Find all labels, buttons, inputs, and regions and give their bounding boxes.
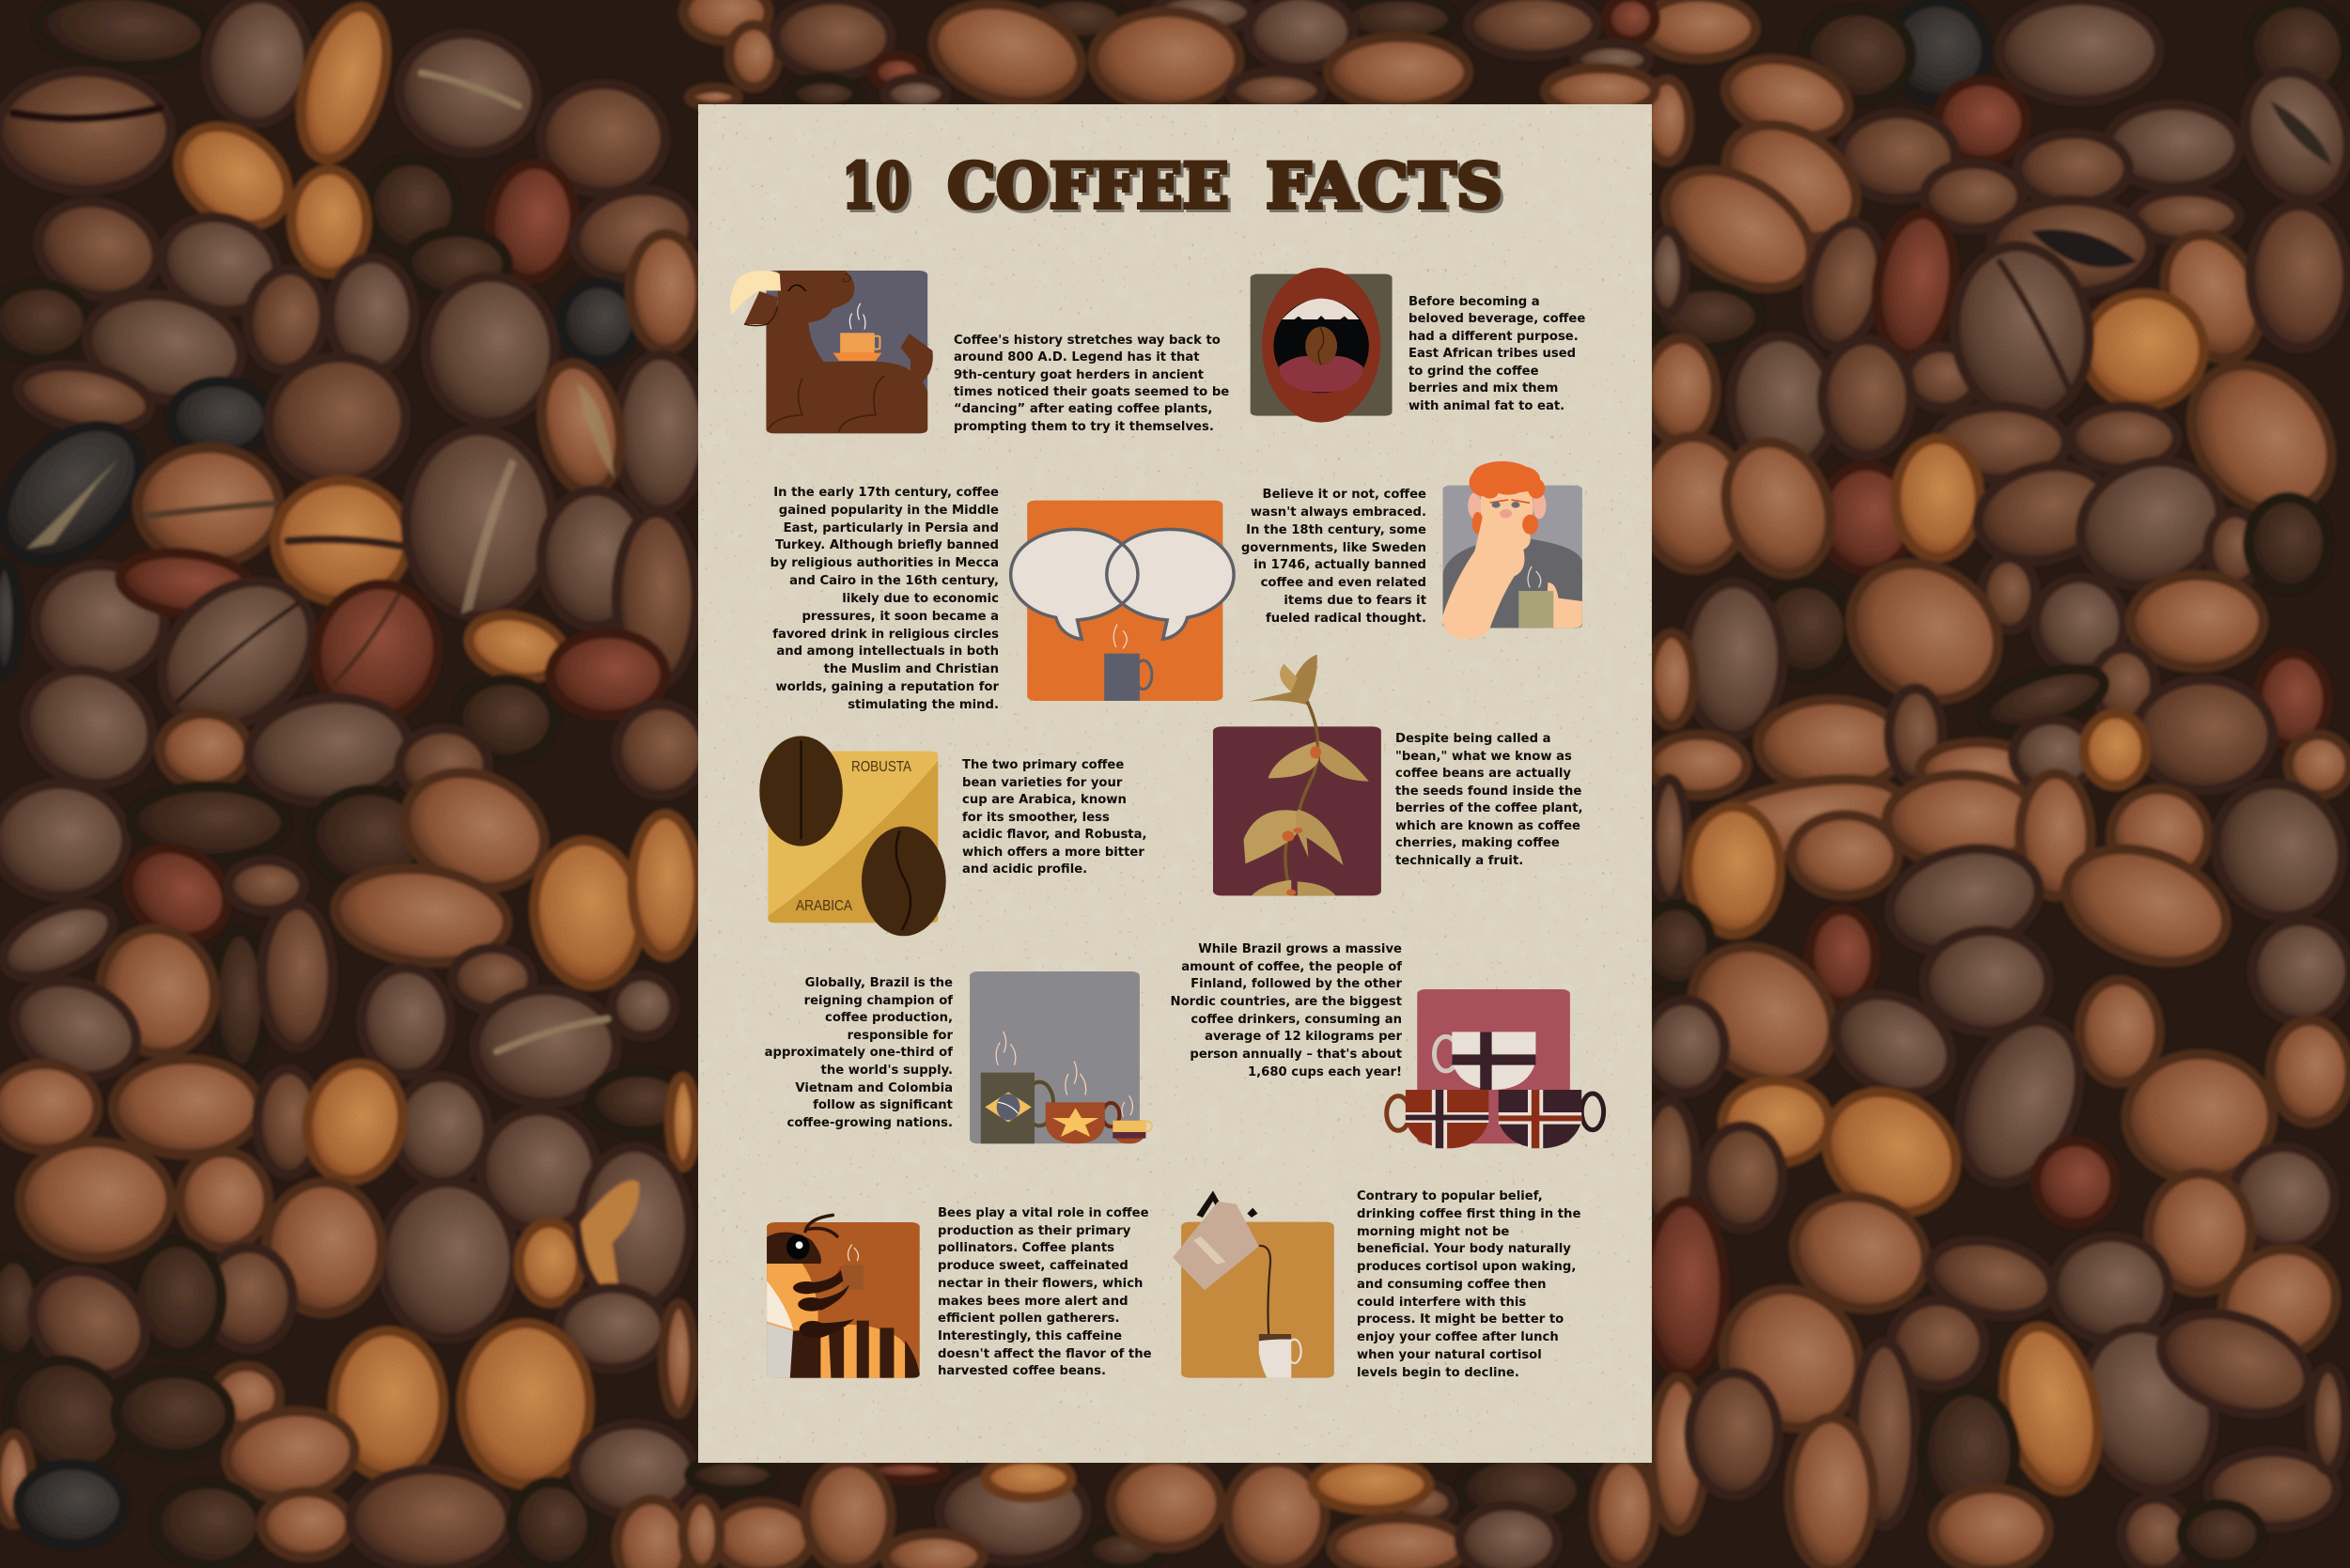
text: fact 9 bees: nectar in their flowers, which — [938, 1277, 1143, 1291]
text: fact 3 Middle East: by religious authorities in Mecca — [770, 556, 999, 570]
text: fact 5 bean varieties: for its smoother, less — [962, 810, 1110, 825]
text: fact 4 Sweden ban: fueled radical thought. — [1266, 612, 1426, 626]
text: fact 1 goat herders: “dancing” after eating coffee plants, — [954, 402, 1212, 416]
text: fact 8 Finland consumption: amount of coffee, the people of — [1181, 960, 1402, 974]
text: fact 4 Sweden ban: wasn't always embraced. — [1251, 505, 1426, 520]
text: fact 3 Middle East: gained popularity in the Middle — [779, 504, 999, 518]
text: fact 6 coffee cherries: berries of the coffee plant, — [1395, 801, 1583, 815]
text: fact 6 coffee cherries: coffee beans are actually — [1395, 767, 1571, 781]
text: fact 2 East African tribes — [1408, 295, 1585, 413]
text: fact 10 cortisol timing — [1357, 1189, 1580, 1380]
text: fact 9 bees — [938, 1206, 1152, 1378]
text: fact 6 coffee cherries: "bean," what we know as — [1395, 750, 1572, 764]
text: fact 5 bean varieties: bean varieties for your — [962, 776, 1122, 789]
text: fact 5 bean varieties: acidic flavor, and Robusta, — [962, 828, 1147, 842]
text: fact 1 goat herders: times noticed their goats seemed to be — [954, 385, 1229, 399]
title: 10 — [842, 149, 910, 223]
text: fact 3 Middle East: likely due to economic — [842, 592, 999, 606]
text: fact 9 bees: Bees play a vital role in coffee — [938, 1206, 1149, 1220]
text: fact 2 East African tribes: with animal fat to eat. — [1408, 399, 1564, 413]
text: fact 6 coffee cherries: which are known as coffee — [1395, 819, 1580, 833]
text: fact 4 Sweden ban: coffee and even related — [1261, 576, 1426, 590]
text: fact 5 bean varieties: cup are Arabica, known — [962, 793, 1127, 807]
label: Arabica: ARABICA — [796, 898, 853, 914]
text: fact 9 bees: pollinators. Coffee plants — [938, 1241, 1114, 1255]
icon: goat with coffee — [730, 271, 933, 433]
text: fact 7 Brazil production: coffee production, — [825, 1011, 953, 1025]
text: fact 3 Middle East: worlds, gaining a reputation for — [776, 680, 999, 694]
text: fact 10 cortisol timing: enjoy your coffee after lunch — [1357, 1330, 1559, 1344]
text: fact 1 goat herders — [954, 334, 1229, 434]
text: fact 5 bean varieties — [962, 758, 1147, 877]
text: fact 1 goat herders: 9th-century goat herders in ancient — [954, 368, 1204, 382]
label: Robusta: ROBUSTA — [851, 759, 912, 775]
text: fact 3 Middle East: favored drink in religious circles — [772, 628, 999, 642]
text: fact 3 Middle East: and among intellectuals in both — [776, 644, 999, 659]
text: fact 9 bees: efficient pollen gatherers. — [938, 1312, 1119, 1326]
icon: coffee plant — [1213, 655, 1381, 895]
text: fact 6 coffee cherries: Despite being called a — [1395, 732, 1550, 746]
text: fact 8 Finland consumption: average of 12 kilograms per — [1205, 1030, 1402, 1044]
text: fact 7 Brazil production: Globally, Brazil is the — [805, 976, 953, 990]
text: fact 10 cortisol timing: drinking coffee first thing in the — [1357, 1207, 1580, 1221]
text: fact 8 Finland consumption: person annually – that's about — [1190, 1048, 1402, 1062]
text: fact 10 cortisol timing: when your natural cortisol — [1357, 1348, 1542, 1362]
text: fact 9 bees: produce sweet, caffeinated — [938, 1259, 1128, 1273]
text: fact 10 cortisol timing: process. It might be better to — [1357, 1312, 1564, 1327]
text: fact 10 cortisol timing: could interfere with this — [1357, 1296, 1526, 1310]
text: fact 9 bees: harvested coffee beans. — [938, 1364, 1106, 1378]
title — [842, 149, 1502, 223]
text: fact 7 Brazil production: Vietnam and Colombia — [795, 1081, 953, 1095]
text: fact 9 bees: doesn't affect the flavor of the — [938, 1347, 1152, 1361]
text: fact 7 Brazil production — [765, 976, 953, 1130]
text: fact 10 cortisol timing: morning might not be — [1357, 1225, 1509, 1239]
text: fact 3 Middle East — [770, 486, 999, 712]
text: fact 8 Finland consumption: Nordic countries, are the biggest — [1171, 995, 1402, 1009]
icon: pour-over coffee pot and cup — [1173, 1190, 1334, 1378]
text: fact 7 Brazil production: approximately one-third of — [765, 1046, 953, 1060]
text: fact 6 coffee cherries — [1395, 732, 1583, 868]
text: fact 6 coffee cherries: technically a fruit. — [1395, 854, 1523, 868]
text: fact 2 East African tribes: had a different purpose. — [1408, 330, 1579, 344]
text: fact 3 Middle East: stimulating the mind. — [848, 698, 999, 712]
text: fact 2 East African tribes: berries and mix them — [1408, 381, 1558, 396]
text: fact 3 Middle East: Turkey. Although briefly banned — [775, 538, 999, 552]
text: fact 9 bees: Interestingly, this caffeine — [938, 1329, 1122, 1343]
title: FACTS — [1266, 149, 1502, 223]
title: COFFEE — [947, 149, 1229, 223]
text: fact 1 goat herders: around 800 A.D. Legend has it that — [954, 350, 1200, 365]
icon: speech bubbles and mug — [1011, 501, 1234, 701]
text: fact 8 Finland consumption — [1171, 942, 1402, 1079]
text: fact 6 coffee cherries: cherries, making coffee — [1395, 836, 1560, 850]
text: fact 4 Sweden ban: In the 18th century, some — [1246, 523, 1426, 537]
text: fact 10 cortisol timing: beneficial. Your body naturally — [1357, 1242, 1571, 1256]
text: fact 2 East African tribes: East African tribes used — [1408, 347, 1576, 361]
text: fact 3 Middle East: In the early 17th century, coffee — [773, 486, 999, 500]
text: fact 10 cortisol timing: and consuming coffee then — [1357, 1278, 1547, 1292]
text: fact 5 bean varieties: which offers a more bitter — [962, 846, 1144, 859]
text: fact 7 Brazil production: responsible for — [848, 1029, 953, 1043]
text: fact 8 Finland consumption: Finland, followed by the other — [1191, 977, 1402, 991]
text: fact 3 Middle East: East, particularly in Persia and — [784, 521, 999, 536]
icon: open mouth with bean — [1251, 268, 1393, 423]
text: fact 9 bees: makes bees more alert and — [938, 1295, 1128, 1309]
text: fact 2 East African tribes: to grind the coffee — [1408, 365, 1539, 379]
text: fact 4 Sweden ban — [1241, 488, 1426, 626]
icon: thinking man with mug — [1442, 461, 1582, 639]
icon: robusta and arabica beans — [759, 736, 946, 936]
text: fact 1 goat herders: Coffee's history stretches way back to — [954, 334, 1221, 348]
text: fact 3 Middle East: pressures, it soon became a — [801, 610, 999, 624]
text: fact 4 Sweden ban: items due to fears it — [1284, 594, 1426, 608]
text: fact 2 East African tribes: Before becoming a — [1408, 295, 1540, 309]
text: fact 8 Finland consumption: coffee drinkers, consuming an — [1191, 1013, 1402, 1027]
text: fact 5 bean varieties: and acidic profile. — [962, 862, 1087, 877]
text: fact 7 Brazil production: the world's supply. — [821, 1063, 953, 1078]
text: fact 2 East African tribes: beloved beverage, coffee — [1408, 312, 1585, 326]
text: fact 10 cortisol timing: levels begin to decline. — [1357, 1366, 1519, 1380]
text: fact 6 coffee cherries: the seeds found inside the — [1395, 784, 1581, 799]
text: fact 10 cortisol timing: produces cortisol upon waking, — [1357, 1260, 1576, 1274]
icon: Nordic flag cups — [1387, 989, 1604, 1148]
text: fact 8 Finland consumption: 1,680 cups each year! — [1248, 1065, 1402, 1079]
icon: bee holding coffee — [767, 1215, 920, 1378]
text: fact 3 Middle East: the Muslim and Christian — [824, 662, 999, 676]
icon: coffee mugs with Brazil flag — [970, 971, 1152, 1143]
text: fact 7 Brazil production: reigning champion of — [804, 994, 953, 1008]
text: fact 1 goat herders: prompting them to try it themselves. — [954, 420, 1214, 434]
text: fact 8 Finland consumption: While Brazil grows a massive — [1198, 942, 1402, 956]
text: fact 3 Middle East: and Cairo in the 16th century, — [789, 574, 999, 588]
text: fact 7 Brazil production: follow as significant — [813, 1098, 953, 1112]
text: fact 5 bean varieties: The two primary coffee — [962, 758, 1124, 772]
text: fact 10 cortisol timing: Contrary to popular belief, — [1357, 1189, 1543, 1203]
text: fact 7 Brazil production: coffee-growing nations. — [787, 1116, 953, 1130]
text: fact 4 Sweden ban: in 1746, actually banned — [1253, 558, 1426, 572]
text: fact 9 bees: production as their primary — [938, 1224, 1130, 1238]
text: fact 4 Sweden ban: governments, like Sweden — [1241, 541, 1426, 555]
text: fact 4 Sweden ban: Believe it or not, coffee — [1263, 488, 1426, 502]
